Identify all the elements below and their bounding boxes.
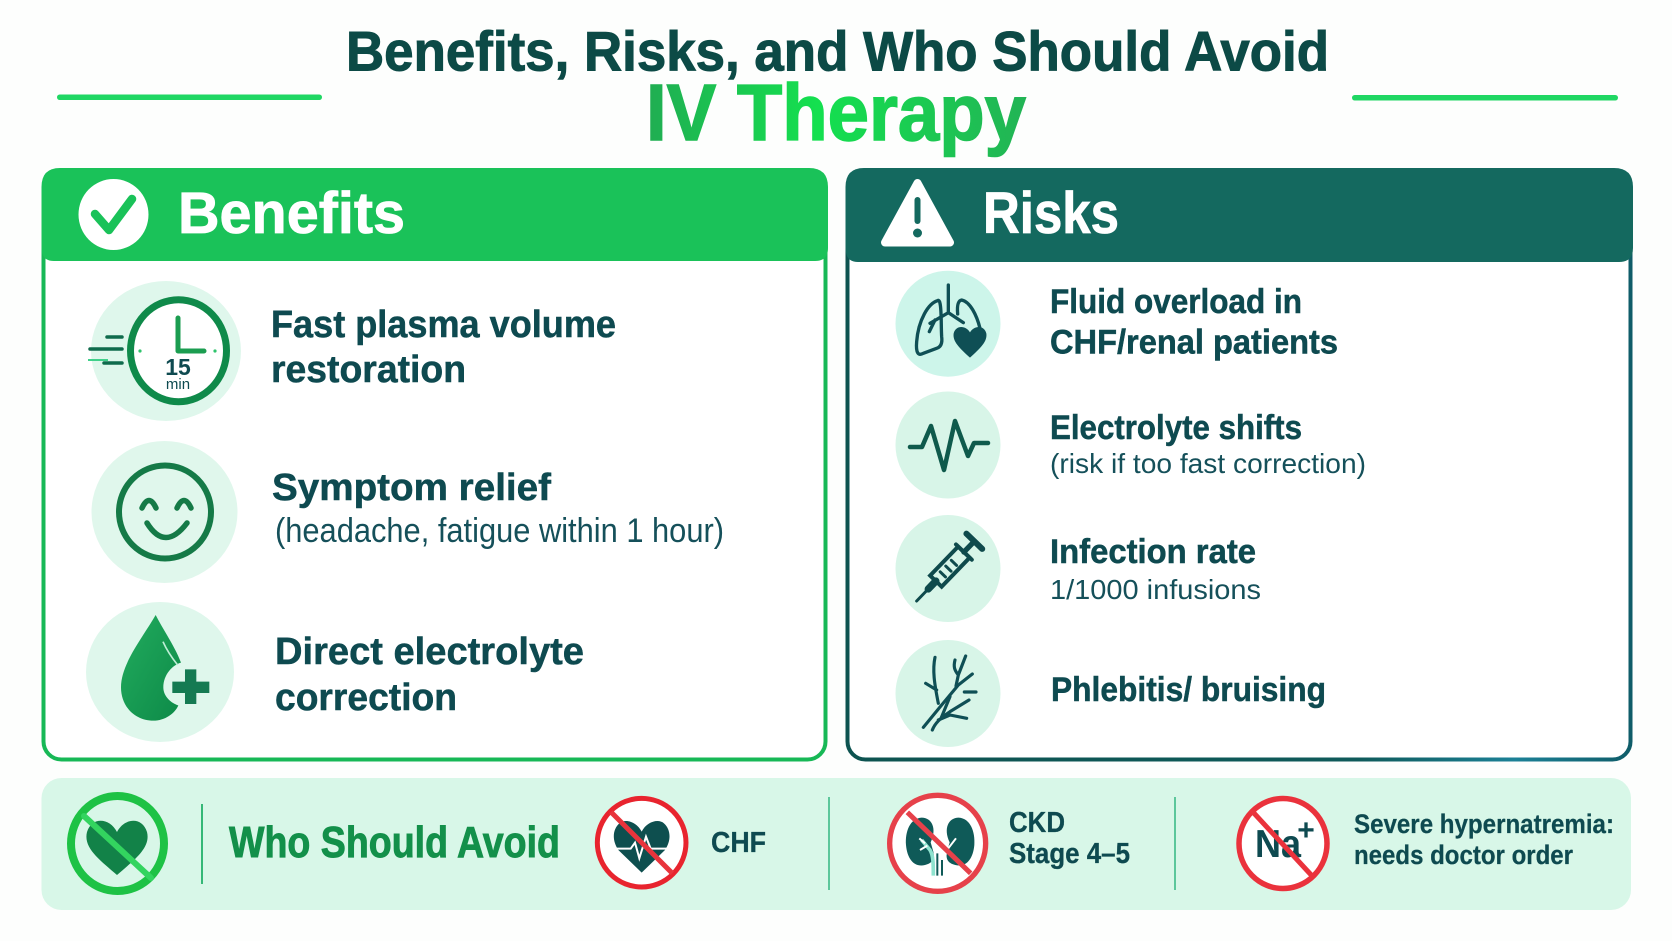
item text: correction xyxy=(275,677,457,719)
header bar xyxy=(42,168,828,261)
band background xyxy=(42,778,1631,910)
hypernatremia label: Severe hypernatremia: xyxy=(1354,809,1614,839)
item text: restoration xyxy=(271,349,466,391)
icon: no sodium xyxy=(1237,796,1329,890)
icon: no sodium: Na xyxy=(1255,823,1301,866)
icon: no kidneys xyxy=(888,794,987,893)
item text xyxy=(1050,409,1366,479)
CKD label: Stage 4–5 xyxy=(1009,838,1130,870)
panel body xyxy=(44,190,826,760)
item text: (risk if too fast correction) xyxy=(1050,448,1366,479)
icon: crossed heart xyxy=(71,796,164,891)
icon: veins xyxy=(896,640,1000,747)
hypernatremia label: needs doctor order xyxy=(1354,840,1573,870)
header bar xyxy=(846,168,1633,262)
title line 2: IV Therapy xyxy=(646,68,1026,157)
icon: check badge xyxy=(78,179,148,250)
CHF label: CHF xyxy=(711,827,766,859)
CKD label xyxy=(1009,807,1130,870)
item: infection rate xyxy=(896,515,1261,622)
item text xyxy=(271,304,616,391)
item: direct electrolyte correction xyxy=(86,602,584,742)
item text xyxy=(272,467,724,550)
panel: benefits xyxy=(42,168,828,760)
item: electrolyte shifts xyxy=(896,392,1366,498)
panel: who should avoid xyxy=(42,778,1631,910)
left title rule xyxy=(57,94,322,100)
right title rule xyxy=(1352,95,1618,100)
panel body xyxy=(848,190,1630,760)
item text: Electrolyte shifts xyxy=(1050,409,1302,447)
divider xyxy=(201,804,203,884)
item: fluid overload xyxy=(896,271,1338,377)
panel: risks xyxy=(846,168,1633,760)
item text: Infection rate xyxy=(1050,533,1256,571)
item text: Fluid overload in xyxy=(1050,283,1302,321)
icon: syringe xyxy=(896,515,1000,622)
hypernatremia label xyxy=(1354,809,1614,870)
divider xyxy=(828,797,830,890)
icon: clock 15 min xyxy=(88,281,241,421)
divider xyxy=(1174,797,1176,890)
item text xyxy=(1050,533,1261,605)
icon: warning triangle xyxy=(885,183,950,242)
who should avoid heading: Who Should Avoid xyxy=(229,818,560,867)
icon: no heart xyxy=(595,796,688,889)
item: symptom relief xyxy=(92,441,724,583)
item text: (headache, fatigue within 1 hour) xyxy=(275,512,724,550)
icon: clock 15 min: min xyxy=(166,376,190,393)
item: fast plasma volume xyxy=(88,281,616,421)
item: CHF xyxy=(595,796,766,889)
icon: lungs and heart xyxy=(896,271,1000,377)
risks heading: Risks xyxy=(983,181,1119,246)
item text: Phlebitis/ bruising xyxy=(1051,671,1326,709)
item text xyxy=(275,631,584,719)
CKD label: CKD xyxy=(1009,807,1065,839)
item text: Fast plasma volume xyxy=(271,304,616,346)
icon: pulse line xyxy=(896,392,1000,498)
icon: clock 15 min: 15 xyxy=(165,354,191,380)
item: severe hypernatremia xyxy=(1237,796,1614,890)
item: CKD xyxy=(888,794,1130,893)
benefits heading: Benefits xyxy=(178,181,405,246)
icon: no sodium: + xyxy=(1297,814,1315,847)
icon: drop with plus xyxy=(86,602,234,742)
item text xyxy=(1050,283,1338,362)
item text: Direct electrolyte xyxy=(275,631,584,673)
item: phlebitis xyxy=(896,640,1326,747)
item text: 1/1000 infusions xyxy=(1050,574,1261,605)
item text: Symptom relief xyxy=(272,467,551,509)
title line 1: Benefits, Risks, and Who Should Avoid xyxy=(346,20,1329,82)
title xyxy=(346,20,1329,157)
item text: CHF/renal patients xyxy=(1050,324,1338,362)
icon: smiling face xyxy=(92,441,238,583)
